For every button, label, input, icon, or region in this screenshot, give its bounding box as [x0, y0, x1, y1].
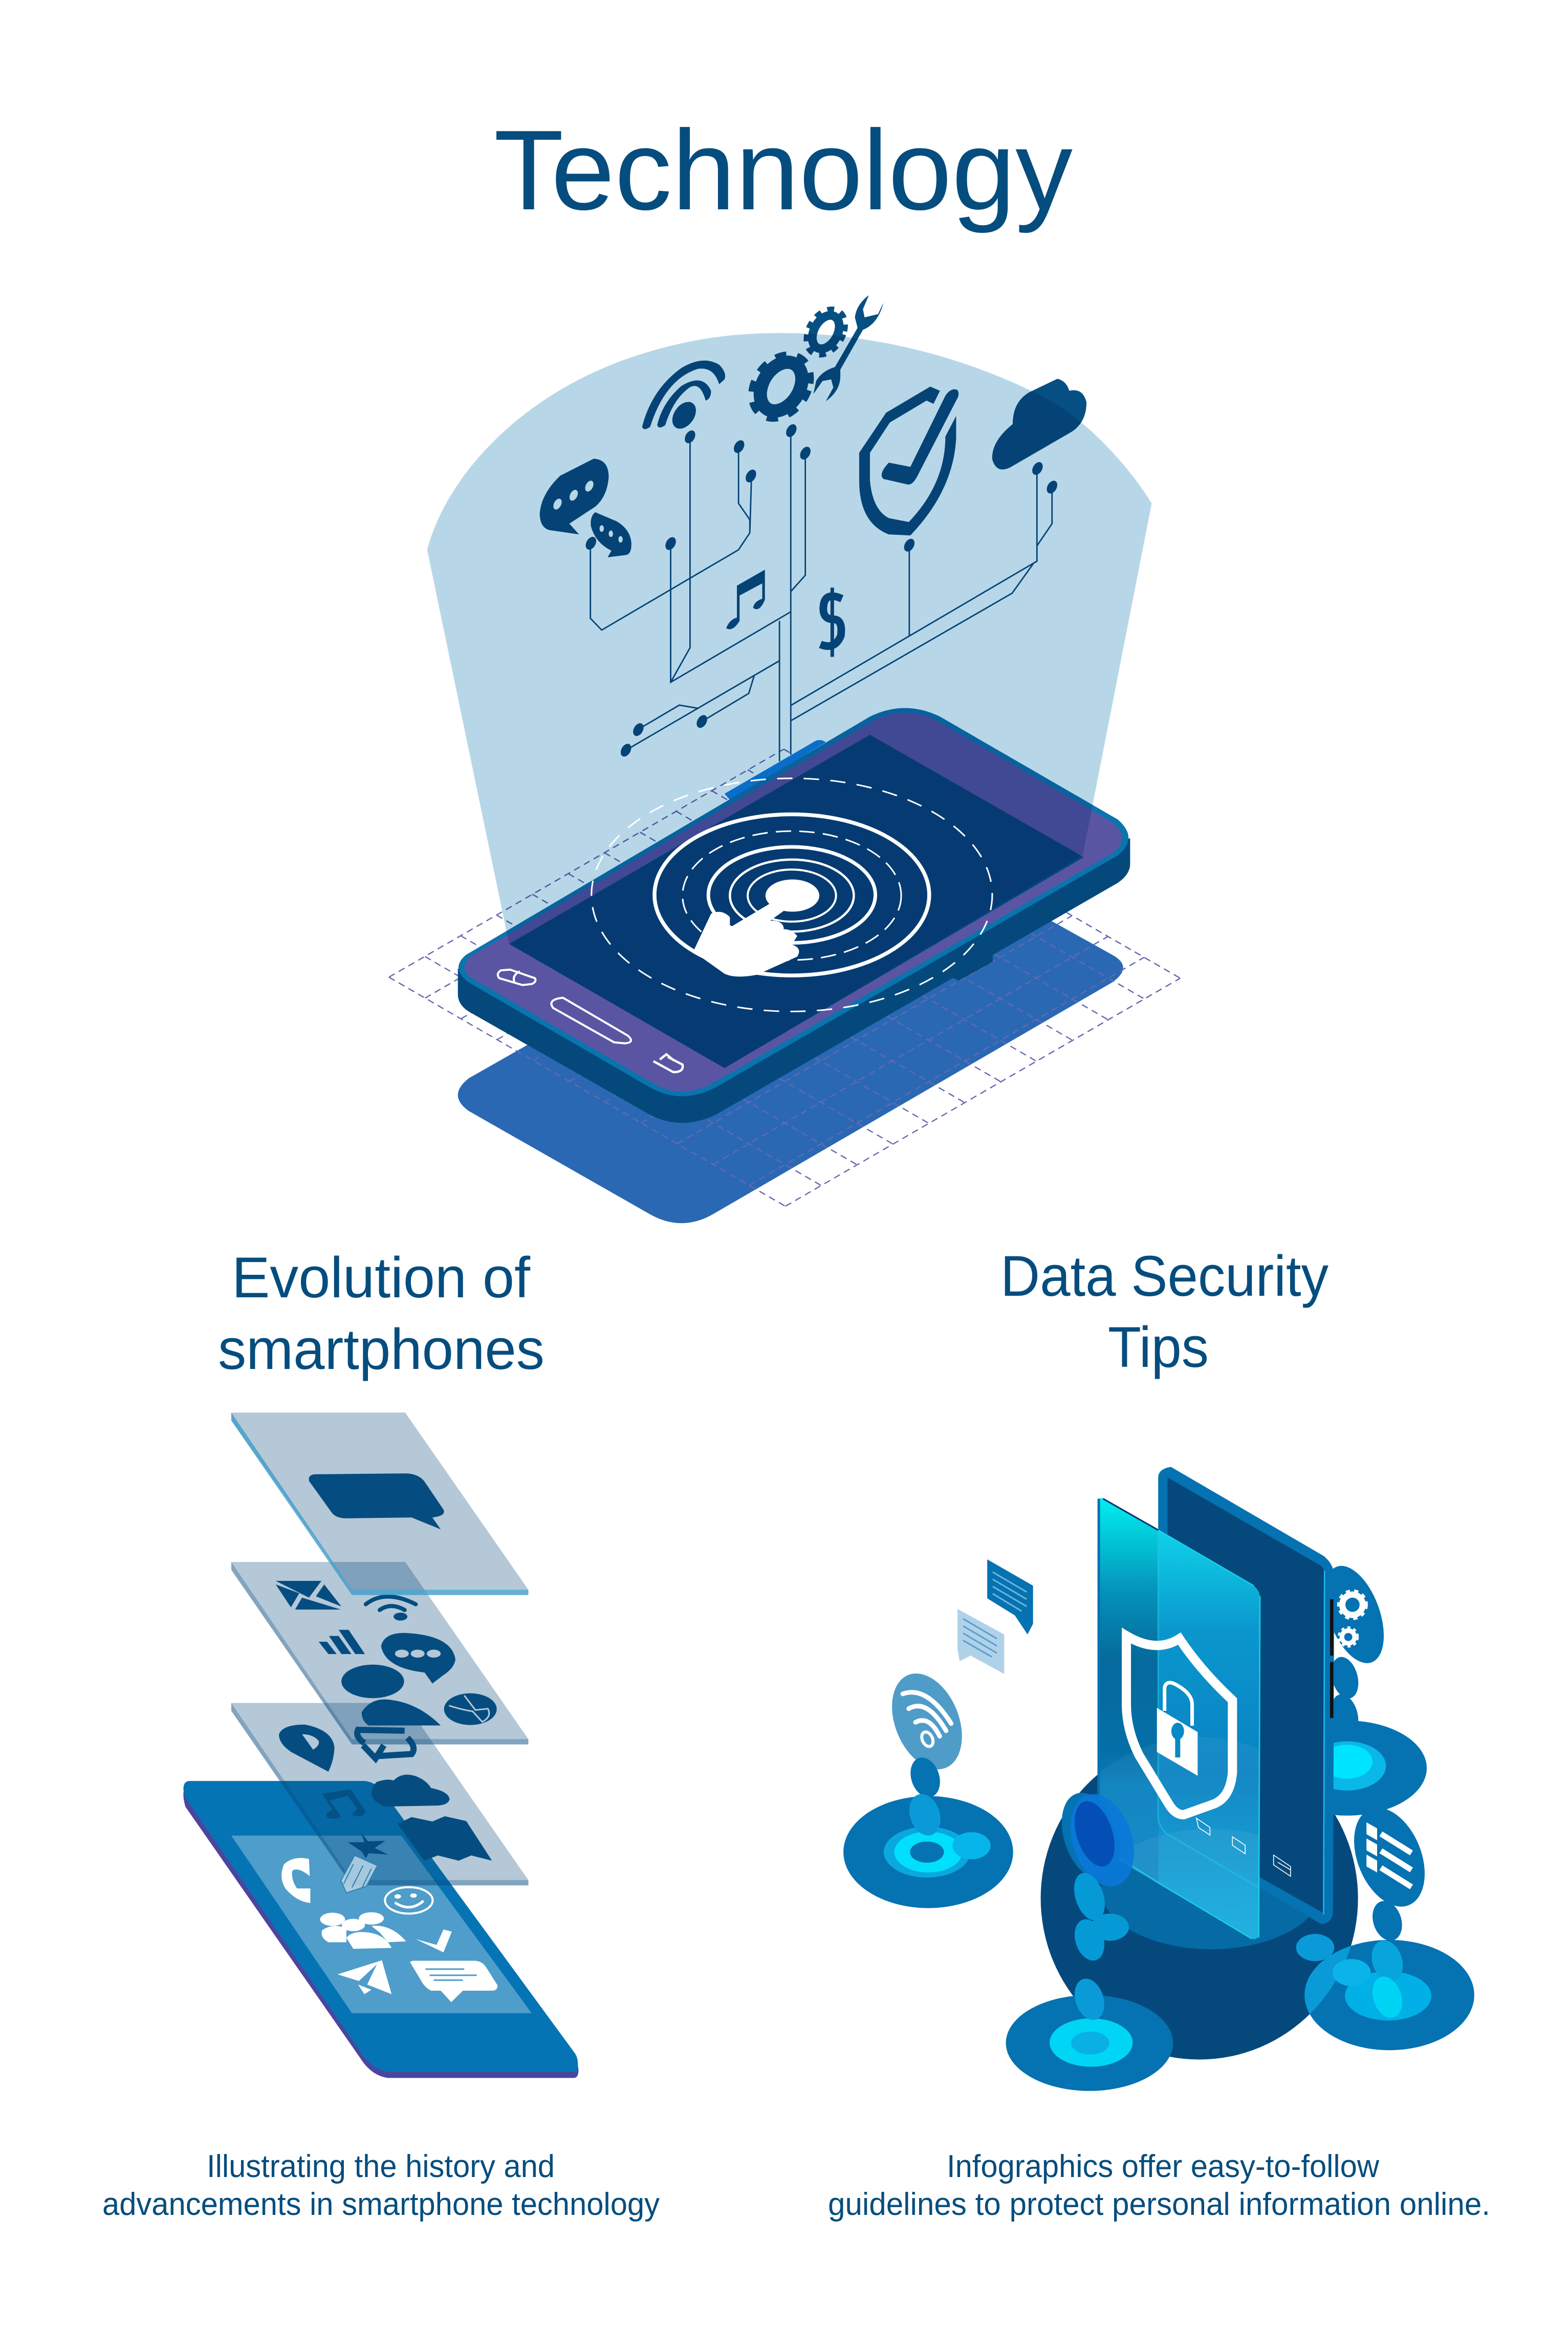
chat card dark	[987, 1559, 1033, 1635]
circuit traces	[591, 431, 1052, 761]
lower button	[951, 953, 993, 981]
icon: pin	[279, 1725, 335, 1772]
phone rim	[459, 708, 1128, 1096]
icon: large message	[309, 1473, 444, 1529]
icon: person	[341, 1665, 441, 1726]
icon: dollar sign	[820, 588, 842, 657]
dashed inner ring	[683, 831, 901, 960]
caption: data security	[828, 2149, 1490, 2222]
blue bubble on glass	[1052, 1786, 1145, 1895]
bottom glass layer	[231, 1703, 528, 1893]
icon: paper plane	[338, 1960, 391, 1994]
icon: people	[320, 1912, 406, 1949]
solid inner ring	[708, 847, 875, 943]
illustration: isometric dashed grid	[389, 749, 1180, 1206]
phone screen	[509, 735, 1084, 1068]
icon: chat	[381, 1633, 455, 1684]
top glass layer	[231, 1412, 528, 1595]
caption: data security: guidelines to protect personal information online.	[828, 2187, 1490, 2222]
wifi bubble	[879, 1663, 975, 1780]
icon: shield with check	[859, 386, 959, 535]
icon: music note	[322, 1789, 366, 1819]
illustration: blue base plate	[458, 835, 1123, 1223]
list bubble	[1340, 1797, 1439, 1917]
lower right disc	[1296, 1934, 1474, 2050]
panel: layered smartphone illustration	[183, 1412, 578, 2078]
dark sphere	[1041, 1737, 1358, 2059]
heading: evolution of smartphones: smartphones	[218, 1317, 545, 1381]
lower centre disc	[1006, 1975, 1173, 2091]
middle glass layer	[231, 1562, 528, 1745]
touch rings and hand	[592, 778, 992, 1011]
icon: wrench	[813, 295, 883, 401]
small bubbles	[1327, 1654, 1363, 1739]
bubble: gears	[1313, 1558, 1396, 1671]
icon: envelope	[276, 1581, 341, 1609]
heading: data security tips	[1000, 1244, 1329, 1379]
icon: refresh arrows	[357, 1730, 413, 1758]
dashed outer ring	[592, 778, 992, 1011]
icon: star	[348, 1832, 388, 1859]
icon: music note	[726, 570, 765, 629]
phone body	[458, 838, 1130, 1123]
caption: smartphones: advancements in smartphone technology	[102, 2187, 660, 2222]
caption: smartphones: Illustrating the history and	[207, 2149, 555, 2184]
holographic light beam	[427, 333, 1151, 1068]
solid ring	[655, 814, 929, 975]
side button	[725, 740, 826, 800]
heading: evolution of smartphones: Evolution of	[232, 1246, 531, 1310]
icon: bar signal	[319, 1630, 365, 1654]
back phone	[1158, 1467, 1334, 1924]
nav icons	[1196, 1818, 1291, 1876]
icon: cloud	[992, 379, 1086, 469]
title: Technology	[494, 107, 1073, 234]
icon: pie chart	[444, 1693, 497, 1725]
icon: smiley	[385, 1887, 432, 1913]
icon: pointing hand	[693, 902, 799, 976]
icon: wifi	[366, 1597, 416, 1621]
small stem bubble	[906, 1754, 945, 1801]
shield with padlock	[1126, 1636, 1232, 1815]
lower disc glow	[1101, 1829, 1321, 1949]
glass panel	[1097, 1498, 1261, 1940]
right disc	[1267, 1721, 1427, 1816]
panel: data security illustration	[843, 1467, 1474, 2091]
icon: check	[416, 1929, 452, 1952]
circuit nodes	[584, 424, 1059, 757]
heading: evolution of smartphones	[218, 1246, 545, 1381]
icon: small gear	[800, 308, 851, 357]
icon: map	[398, 1816, 492, 1861]
smartphone	[458, 708, 1130, 1123]
icon: wifi	[642, 360, 725, 430]
touch point	[766, 879, 819, 911]
caption: smartphones	[102, 2149, 660, 2222]
icon: home pill	[551, 998, 631, 1043]
left disc	[843, 1790, 1013, 1908]
icon: message	[410, 1961, 497, 2002]
icon: trash bin	[341, 1856, 378, 1893]
circuit lines and icons	[540, 295, 1086, 761]
icon: handset	[281, 1858, 310, 1903]
icon: back arrow	[654, 1054, 683, 1072]
heading: data security tips: Tips	[1108, 1315, 1209, 1379]
icon: chat bubbles	[540, 459, 631, 557]
chat card light	[957, 1609, 1004, 1674]
caption: data security: Infographics offer easy-to-follow	[947, 2149, 1379, 2184]
stem bubble right	[1368, 1897, 1407, 1945]
stacked bubbles	[1069, 1869, 1129, 1965]
tablet phone	[183, 1781, 578, 2078]
icon: cloud	[372, 1775, 450, 1807]
icon: large gear	[744, 353, 818, 421]
heading: data security tips: Data Security	[1000, 1244, 1329, 1308]
thin rings	[730, 860, 854, 931]
phone bezel	[465, 713, 1122, 1092]
icon: recent apps	[498, 970, 535, 985]
